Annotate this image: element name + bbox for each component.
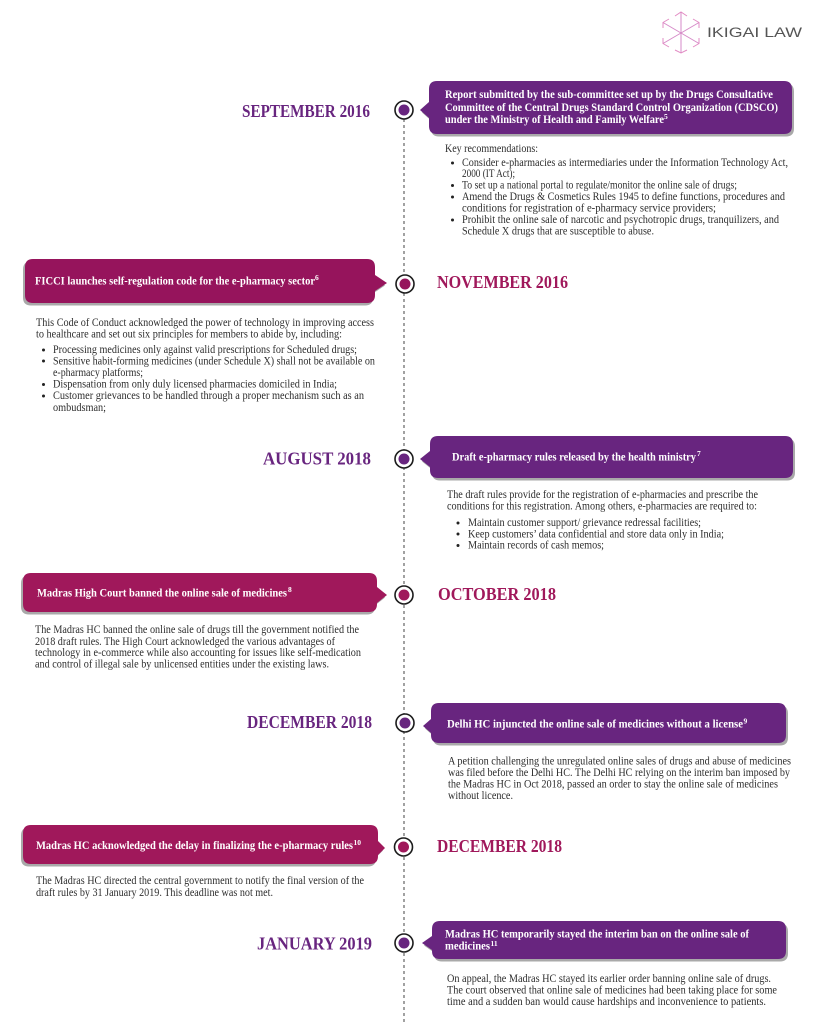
timeline node: [394, 838, 412, 856]
body text: [447, 973, 777, 1008]
panel: October 2018: [21, 573, 556, 670]
body text: without licence.: [448, 790, 513, 802]
timeline node: [395, 101, 413, 119]
date heading: NOVEMBER 2016: [437, 272, 568, 292]
date heading: JANUARY 2019: [257, 934, 372, 954]
callout banner: [420, 436, 795, 480]
logo wordmark: IKIGAI LAW: [707, 25, 802, 40]
body text: Schedule X drugs that are susceptible to abuse.: [462, 226, 654, 238]
body text: e-pharmacy platforms;: [53, 367, 143, 379]
date heading: DECEMBER 2018: [247, 712, 372, 732]
timeline spine: [403, 119, 405, 1024]
callout banner: [21, 573, 387, 614]
callout banner: [21, 825, 385, 866]
panel: December 2018 (Delhi HC): [247, 703, 791, 802]
date heading: SEPTEMBER 2016: [242, 101, 370, 121]
body text: Customer grievances to be handled through a proper mechanism such as an: [53, 390, 364, 402]
panel: September 2016: [242, 81, 794, 238]
body text: [445, 143, 788, 238]
body text: to healthcare and set out six principles for members to abide by, including:: [36, 328, 342, 340]
callout banner: [420, 81, 794, 136]
callout banner: 5: [664, 112, 668, 121]
body text: Prohibit the online sale of narcotic and psychotropic drugs, tranquilizers, and: [462, 214, 779, 226]
timeline node: [395, 934, 413, 952]
body text: Dispensation from only duly licensed pharmacies domiciled in India;: [53, 378, 337, 390]
callout banner: 9: [744, 716, 748, 726]
callout banner: 11: [490, 939, 498, 948]
body text: Consider e-pharmacies as intermediaries under the Information Technology Act,: [462, 157, 788, 169]
callout banner: FICCI launches self-regulation code for the e-pharmacy sector: [35, 276, 315, 288]
body text: Maintain records of cash memos;: [468, 540, 604, 552]
body text: The Madras HC banned the online sale of drugs till the government notified the: [35, 624, 359, 636]
callout banner: 8: [288, 585, 292, 594]
panel: November 2016: [23, 259, 568, 414]
body text: Keep customers’ data confidential and store data only in India;: [468, 528, 724, 540]
body text: A petition challenging the unregulated online sales of drugs and abuse of medicines: [448, 756, 791, 768]
body text: time and a sudden ban would cause hardships and inconvenience to patients.: [447, 996, 766, 1008]
callout banner: medicines: [445, 940, 491, 952]
icon: hexagon logo mark: [663, 12, 699, 53]
body text: On appeal, the Madras HC stayed its earlier order banning online sale of drugs.: [447, 973, 771, 985]
callout banner: Madras HC acknowledged the delay in finalizing the e-pharmacy rules: [36, 840, 354, 852]
body text: the Madras HC in Oct 2018, passed an order to stay the online sale of medicines: [448, 778, 778, 790]
date heading: DECEMBER 2018: [437, 836, 562, 856]
timeline node: [395, 586, 413, 604]
body text: conditions for registration of e-pharmacy service providers;: [462, 202, 716, 214]
body text: This Code of Conduct acknowledged the power of technology in improving access: [36, 317, 374, 329]
body text: [447, 489, 758, 552]
callout banner: 7: [697, 449, 701, 458]
panel: January 2019: [257, 921, 788, 1008]
callout banner: Draft e-pharmacy rules released by the health ministry: [452, 452, 696, 464]
body text: ombudsman;: [53, 402, 106, 414]
body text: The court observed that online sale of medicines had been taking place for some: [447, 984, 777, 996]
callout banner: Madras HC temporarily stayed the interim ban on the online sale of: [445, 928, 749, 940]
timeline node: [396, 275, 414, 293]
callout banner: under the Ministry of Health and Family Welfare: [445, 114, 664, 126]
panel: August 2018: [263, 436, 795, 552]
callout banner: Madras High Court banned the online sale of medicines: [37, 588, 288, 600]
body text: draft rules by 31 January 2019. This deadline was not met.: [36, 887, 273, 899]
callout banner: [423, 703, 788, 746]
body text: conditions for this registration. Among others, e-pharmacies are required to:: [447, 500, 757, 512]
body text: [448, 756, 791, 802]
body text: The draft rules provide for the registration of e-pharmacies and prescribe the: [447, 489, 758, 501]
body text: Processing medicines only against valid prescriptions for Scheduled drugs;: [53, 344, 357, 356]
callout banner: Committee of the Central Drugs Standard Control Organization (CDSCO): [445, 102, 778, 114]
callout banner: 10: [354, 838, 361, 847]
body text: Key recommendations:: [445, 143, 538, 155]
body text: Amend the Drugs & Cosmetics Rules 1945 to define functions, procedures and: [462, 191, 785, 203]
callout banner: [422, 921, 788, 962]
body text: The Madras HC directed the central government to notify the final version of the: [36, 875, 364, 887]
body text: Sensitive habit-forming medicines (under Schedule X) shall not be available on: [53, 356, 375, 368]
body text: [36, 317, 375, 414]
callout banner: Report submitted by the sub-committee set up by the Drugs Consultative: [445, 89, 773, 101]
body text: 2000 (IT Act);: [462, 168, 515, 180]
body text: and control of illegal sale by unlicensed entities under the existing laws.: [35, 658, 329, 670]
body text: To set up a national portal to regulate/monitor the online sale of drugs;: [462, 180, 737, 192]
callout banner: 6: [315, 273, 319, 282]
timeline node: [395, 450, 413, 468]
body text: technology in e-commerce while also accounting for issues like self-medication: [35, 647, 361, 659]
date heading: OCTOBER 2018: [438, 584, 556, 604]
body text: Maintain customer support/ grievance redressal facilities;: [468, 517, 701, 529]
timeline node: [396, 714, 414, 732]
date heading: AUGUST 2018: [263, 448, 371, 468]
body text: [35, 624, 361, 670]
callout banner: Delhi HC injuncted the online sale of medicines without a license: [447, 718, 743, 730]
logo: Ikigai Law: [663, 12, 802, 53]
body text: [36, 875, 364, 899]
callout banner: [23, 259, 387, 306]
panel: December 2018 (Madras HC): [21, 825, 562, 899]
body text: 2018 draft rules. The High Court acknowledged the various advantages of: [35, 636, 335, 648]
